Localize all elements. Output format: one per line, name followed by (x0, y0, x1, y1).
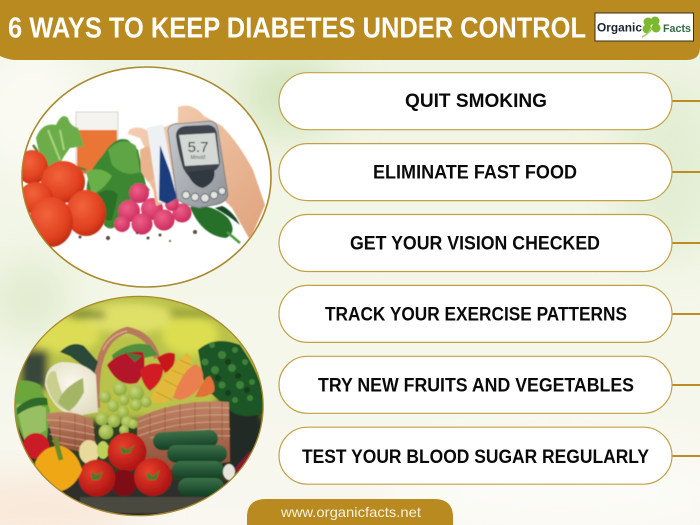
tomatoes (22, 149, 48, 184)
basket handle (96, 330, 157, 408)
carrots (173, 364, 203, 400)
corn (148, 353, 191, 403)
leafy greens (87, 139, 150, 228)
table (60, 480, 230, 515)
peppers red (107, 352, 145, 384)
logo: Organic Facts: Facts (663, 23, 691, 35)
footer website tab (247, 499, 453, 525)
herbs right (198, 341, 268, 416)
radishes (114, 183, 192, 234)
footer website tab: www.organicfacts.net (280, 504, 421, 520)
test strip device (147, 124, 177, 204)
tip 6 (279, 427, 672, 484)
logo: Organic Facts (595, 13, 694, 41)
lettuce (36, 116, 84, 172)
tip 5 (279, 356, 672, 413)
zucchini (60, 344, 98, 374)
tip 2 (279, 144, 672, 201)
tomato stems (32, 144, 87, 172)
header banner (0, 0, 700, 60)
tomatoes and peppers (22, 433, 50, 459)
glucose meter (168, 121, 228, 208)
title: 6 WAYS TO KEEP DIABETES UNDER CONTROL (8, 12, 586, 44)
tip 5: TRY NEW FRUITS AND VEGETABLES (318, 376, 634, 396)
hand (128, 106, 265, 240)
icon: clover (642, 16, 660, 37)
logo: Organic Facts: Organic (597, 22, 643, 34)
garden backdrop (10, 290, 270, 470)
connector lines (672, 101, 700, 456)
basket (46, 401, 230, 470)
glucose meter: Mmol/l (191, 155, 205, 161)
glucose meter: 5.7 (188, 139, 208, 156)
tip 4 (279, 285, 672, 342)
small bright items (79, 440, 99, 464)
tip 1: QUIT SMOKING (405, 91, 547, 112)
onion and garlic at lower right (234, 450, 251, 472)
small herbs near handle (112, 343, 158, 360)
cauliflower (45, 362, 98, 416)
grapes (96, 382, 152, 440)
tip 3: GET YOUR VISION CHECKED (350, 234, 600, 254)
cucumber (190, 206, 233, 238)
greens left (15, 381, 50, 442)
tip 1 (279, 73, 672, 130)
seeds (78, 230, 197, 242)
photo circle: vegetable basket (10, 290, 270, 520)
photo circle: glucose meter and vegetables (16, 67, 271, 287)
tip 2: ELIMINATE FAST FOOD (373, 162, 577, 184)
tip 4: TRACK YOUR EXERCISE PATTERNS (325, 304, 627, 326)
list of six tips (279, 73, 700, 484)
tip 3 (279, 214, 672, 272)
juice glass (76, 112, 118, 174)
tip 6: TEST YOUR BLOOD SUGAR REGULARLY (302, 447, 649, 468)
cucumbers (153, 429, 218, 451)
